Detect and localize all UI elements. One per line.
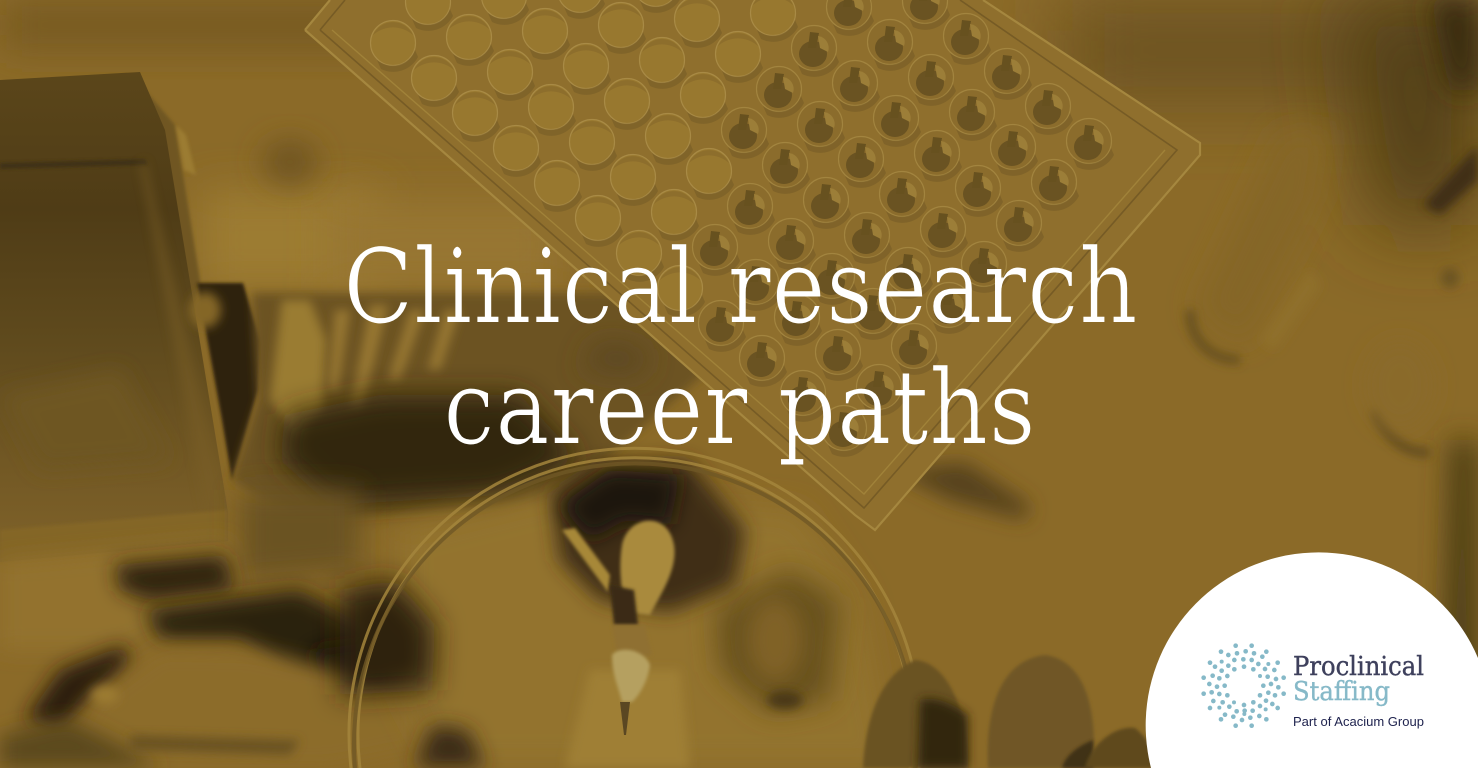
dish contents — [340, 462, 890, 768]
lab coat sleeve — [0, 72, 228, 562]
white logo circle — [1146, 552, 1478, 768]
blurred fingers at right — [1190, 130, 1459, 452]
title — [343, 228, 1138, 468]
plate shadow on bench — [890, 462, 1030, 520]
dark wrist and forearm — [189, 283, 720, 580]
petri dish with dropper — [340, 448, 921, 768]
dish rim — [349, 448, 921, 768]
logo word Staffing: Staffing — [1293, 677, 1390, 707]
dark upper right corner — [1060, 0, 1478, 768]
title line 2: career paths — [443, 349, 1036, 468]
logo tagline: Part of Acacium Group — [1293, 715, 1424, 729]
well plate — [305, 0, 1200, 530]
logo — [1201, 643, 1424, 729]
dropper — [562, 521, 675, 735]
logo word Proclinical: Proclinical — [1293, 652, 1424, 682]
light wells — [370, 0, 798, 317]
logo dot mark — [1201, 643, 1286, 728]
dark hand shadows lower left — [0, 541, 420, 768]
gloved fingers — [863, 655, 1155, 768]
dark shadow behind dropper — [552, 462, 745, 612]
dark wells — [692, 0, 1114, 457]
title line 1: Clinical research — [343, 228, 1138, 347]
